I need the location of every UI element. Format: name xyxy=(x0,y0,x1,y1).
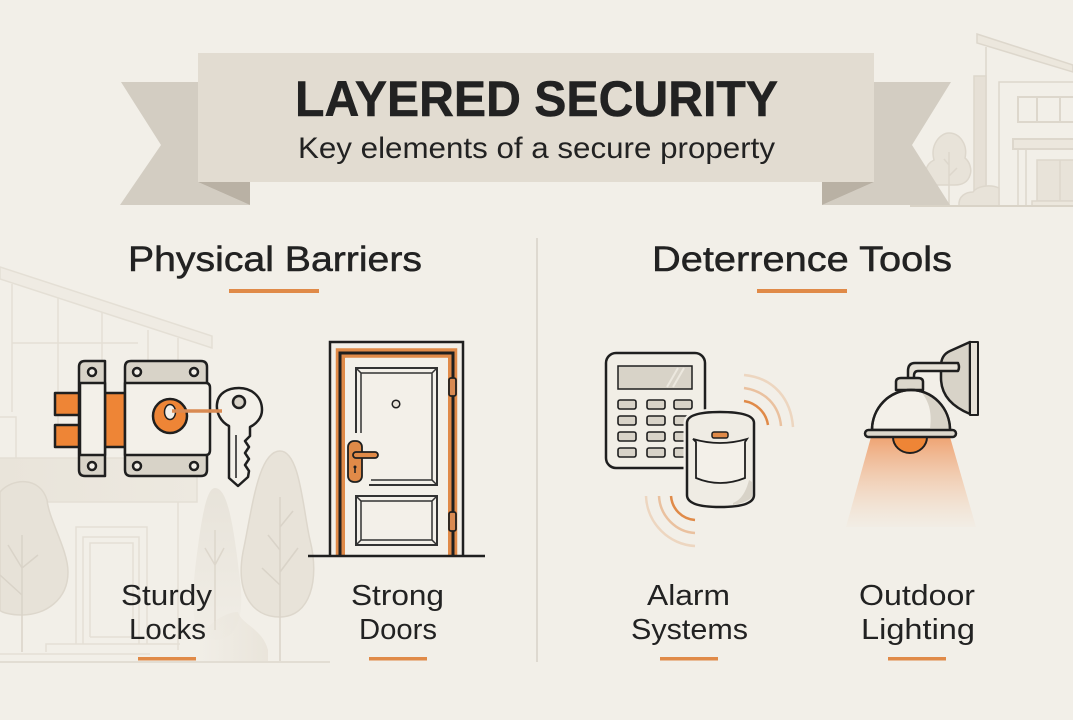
label: Outdoor Lighting: Lighting xyxy=(861,614,975,646)
ribbon right fold xyxy=(822,182,874,205)
background house and trees, left xyxy=(0,267,330,662)
door floor line xyxy=(308,555,485,557)
icon: door lock and key xyxy=(55,361,262,486)
keyhole xyxy=(153,399,187,433)
door leaf xyxy=(345,358,448,556)
upper door panel xyxy=(356,368,437,485)
ribbon left fold xyxy=(198,182,250,205)
subtitle: Key elements of a secure property xyxy=(298,132,775,165)
lamp dome xyxy=(872,390,950,430)
lock main plate xyxy=(125,361,210,476)
door outer frame xyxy=(330,342,463,556)
lock bolts xyxy=(55,393,126,447)
label: Alarm Systems xyxy=(631,580,748,660)
ribbon right tail xyxy=(822,82,951,205)
label: Strong Doors: Strong xyxy=(351,580,444,612)
label: Alarm Systems: Alarm xyxy=(647,580,730,612)
label: Strong Doors: Doors xyxy=(359,614,437,646)
label: Sturdy Locks: Locks xyxy=(129,614,206,646)
alarm signal waves xyxy=(646,375,793,546)
lamp bulb xyxy=(893,437,927,453)
door jamb lines xyxy=(340,353,453,556)
lamp light beam xyxy=(846,437,976,527)
label: Alarm Systems: Systems xyxy=(631,614,748,646)
motion sensor xyxy=(687,412,754,507)
background shrub xyxy=(200,612,268,662)
background house, top right xyxy=(910,34,1073,206)
label: Sturdy Locks xyxy=(121,580,213,660)
heading: Physical Barriers: Physical Barriers xyxy=(128,240,422,279)
key shaft xyxy=(172,409,222,413)
lamp arm xyxy=(908,363,959,380)
heading: Deterrence Tools: Deterrence Tools xyxy=(652,240,952,279)
lock left plate xyxy=(79,361,105,476)
keypad display xyxy=(618,366,692,389)
label: Strong Doors xyxy=(351,580,444,660)
lamp wall mount xyxy=(941,342,978,415)
title: LAYERED SECURITY xyxy=(295,71,778,127)
title ribbon xyxy=(120,53,951,205)
label: Outdoor Lighting: Outdoor xyxy=(859,580,975,612)
lamp rim xyxy=(865,430,956,437)
keypad buttons xyxy=(618,400,692,457)
icon: outdoor wall lamp xyxy=(846,342,978,527)
right background tree xyxy=(241,451,314,662)
label: Outdoor Lighting xyxy=(859,580,975,660)
key xyxy=(217,388,262,486)
door orange frame xyxy=(340,353,452,556)
ribbon main band xyxy=(198,53,874,182)
label: Sturdy Locks: Sturdy xyxy=(121,580,213,612)
ribbon left tail xyxy=(120,82,250,205)
heading: Deterrence Tools xyxy=(652,240,952,293)
lower door panel xyxy=(356,496,437,545)
alarm keypad xyxy=(606,353,705,468)
left background tree xyxy=(0,482,68,652)
lamp cap xyxy=(896,378,923,390)
heading: Physical Barriers xyxy=(128,240,422,293)
peephole xyxy=(392,400,400,408)
door hinges xyxy=(449,378,456,531)
icon: alarm keypad and motion sensor xyxy=(606,353,793,546)
faded background tree xyxy=(193,488,241,640)
door handle xyxy=(348,441,378,482)
icon: strong door xyxy=(308,342,485,556)
centre divider xyxy=(536,238,538,662)
